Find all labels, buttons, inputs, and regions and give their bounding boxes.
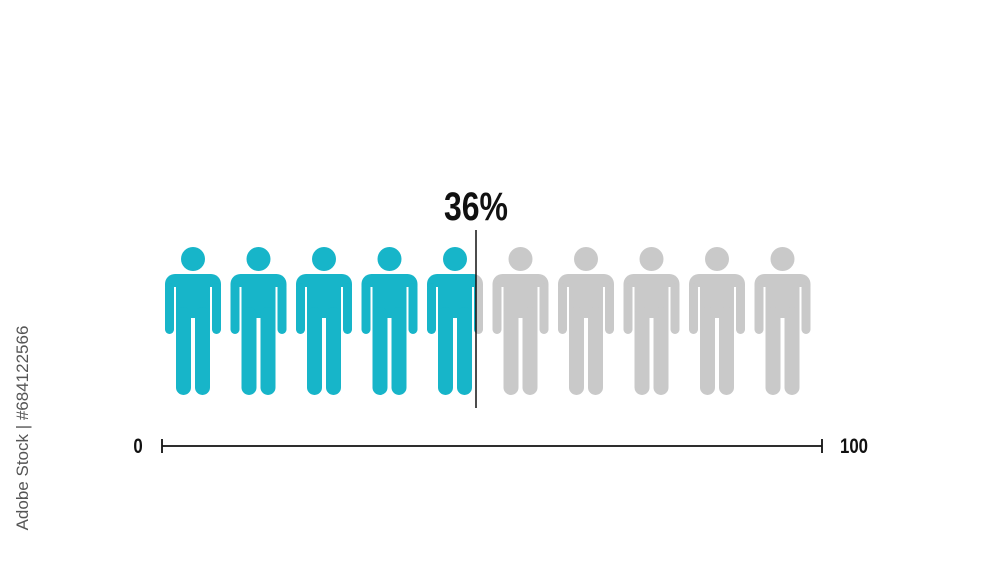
- people icons row: [165, 247, 810, 395]
- scale axis: [162, 439, 822, 453]
- watermark: vertical stock id: Adobe Stock | #684122566: [13, 326, 32, 530]
- percentage label: 36%: [444, 184, 508, 229]
- teal people (filled portion): [165, 247, 476, 395]
- axis label 0: 0: [133, 435, 143, 459]
- axis label 100: 100: [840, 435, 868, 459]
- grey people (remaining portion): [476, 247, 810, 395]
- marker line: [475, 230, 477, 408]
